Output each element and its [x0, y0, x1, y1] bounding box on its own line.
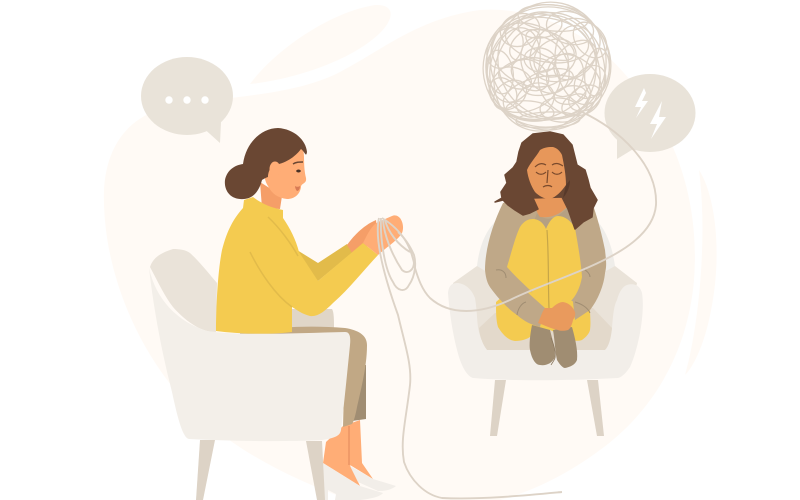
yellow knees [507, 216, 582, 309]
hands [538, 302, 575, 331]
sweater [216, 197, 378, 334]
hair [225, 128, 307, 199]
skirt [240, 327, 367, 427]
speech bubble: lightning [604, 74, 696, 159]
near hand [363, 215, 403, 255]
cardigan [485, 195, 606, 327]
face [264, 140, 306, 199]
yellow lower legs [496, 290, 590, 341]
therapist figure [216, 128, 403, 500]
armchair: patient [448, 215, 643, 436]
lower legs [323, 420, 373, 486]
yarn ball [462, 0, 626, 153]
therapist armchair back [150, 249, 334, 332]
sleeve creases [496, 270, 590, 315]
armchair: therapist [149, 268, 350, 500]
far arm [297, 244, 353, 281]
patient figure [485, 132, 606, 368]
hair shadow [563, 180, 570, 198]
neck [534, 190, 567, 217]
hair [495, 132, 597, 229]
knee crease [547, 230, 549, 308]
socks [530, 325, 555, 365]
background blob [104, 5, 717, 500]
cardigan collar [530, 208, 575, 232]
thread from ball through hands [378, 112, 656, 498]
shoes [350, 466, 396, 491]
back leg [352, 365, 366, 421]
neck [260, 182, 282, 209]
cardigan forearm [488, 272, 545, 327]
face [527, 147, 566, 199]
brows, eyes, mouth [535, 163, 563, 187]
speech bubble: therapist [141, 57, 233, 143]
